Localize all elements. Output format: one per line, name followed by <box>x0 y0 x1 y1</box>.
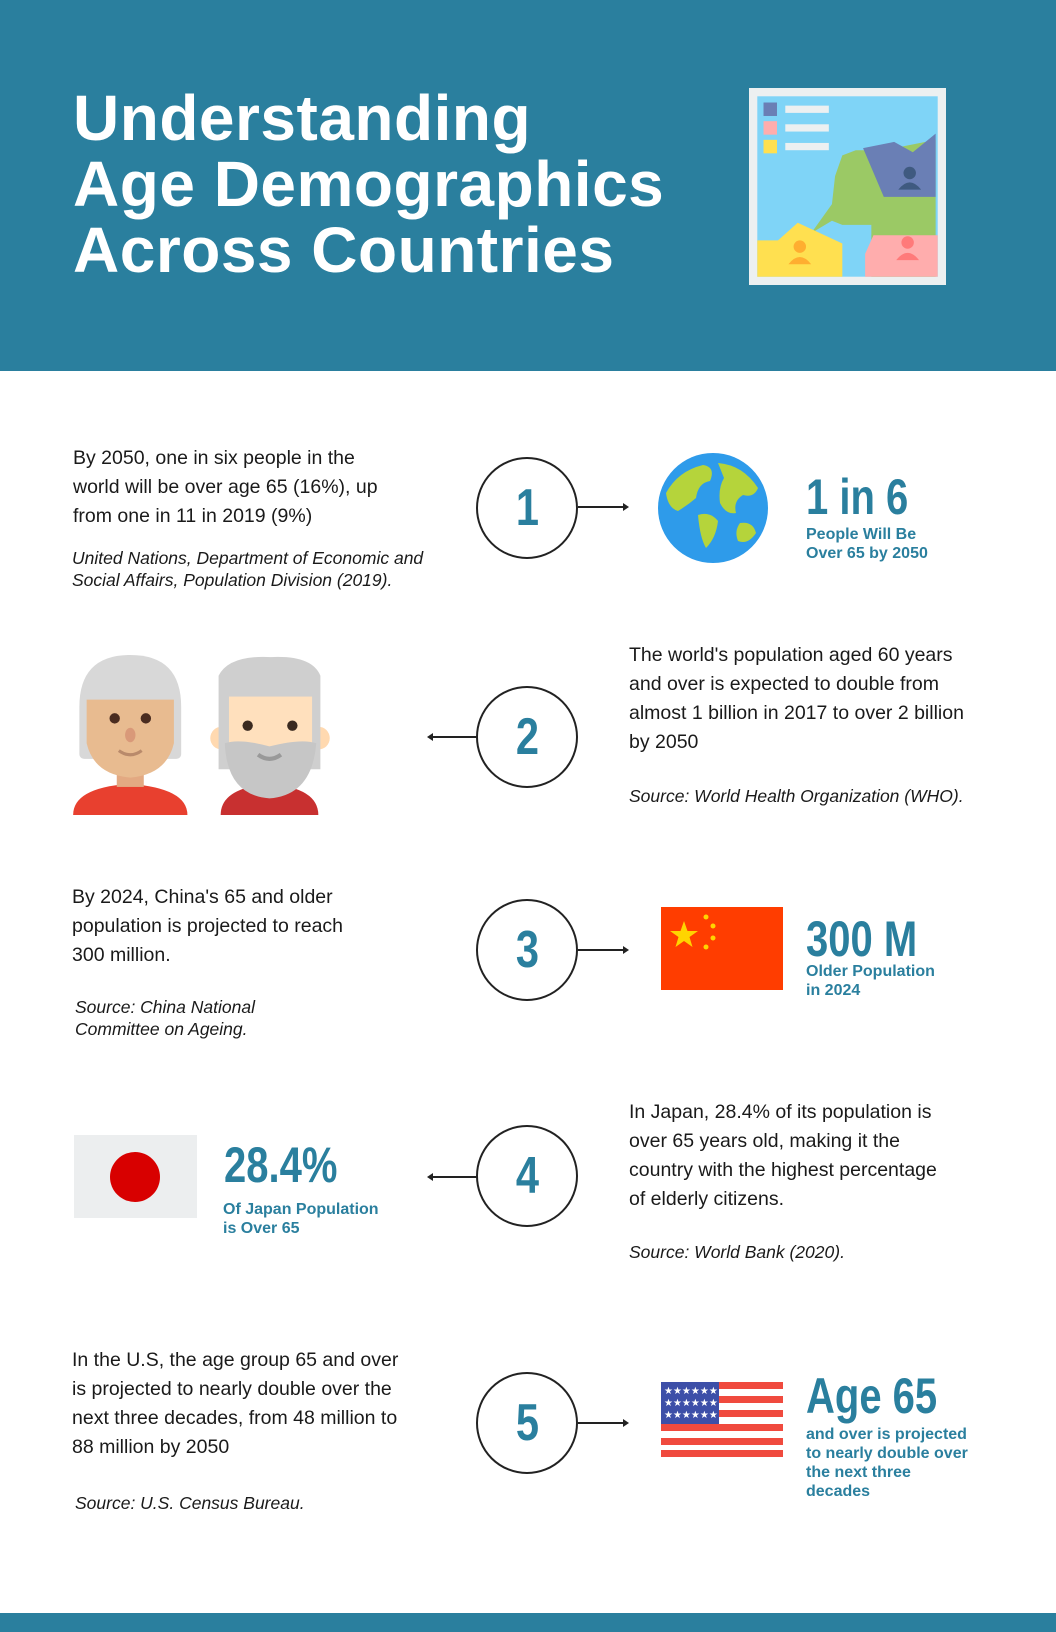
icon: elderly couple <box>73 655 330 815</box>
arrow 1 <box>578 506 627 508</box>
text: row3: By 2024, China's 65 and older <box>72 886 333 908</box>
text: row2: and over is expected to double from <box>629 673 939 695</box>
number circle 1 <box>476 457 578 559</box>
number circle 2: 2 <box>515 708 539 766</box>
stat 4 label: Of Japan Population <box>223 1201 379 1218</box>
source: row1 <box>72 548 424 590</box>
row 2 <box>73 644 964 815</box>
stat 4 label <box>223 1201 379 1237</box>
text: row4: of elderly citizens. <box>629 1188 784 1210</box>
stat 5 label: the next three <box>806 1464 911 1481</box>
icon: japan flag <box>74 1135 197 1218</box>
header band <box>0 0 1056 371</box>
source: row3 <box>75 997 256 1039</box>
stat 4: 28.4% <box>224 1137 337 1193</box>
number circle 4: 4 <box>515 1147 539 1205</box>
stat 1 label <box>806 526 928 562</box>
icon: us flag: ★★★★★★ <box>664 1398 718 1409</box>
stat 3 label: Older Population <box>806 963 935 980</box>
title: Age Demographics <box>73 148 664 220</box>
text: row3 <box>72 886 343 966</box>
stat 1 label: Over 65 by 2050 <box>806 545 928 562</box>
stat 5: Age 65 <box>806 1368 937 1424</box>
number circle 4 <box>476 1125 578 1227</box>
icon: china flag <box>661 907 783 990</box>
text: row2: almost 1 billion in 2017 to over 2 billion <box>629 702 964 724</box>
number circle 5 <box>476 1372 578 1474</box>
stat 1: 1 in 6 <box>806 469 908 525</box>
row 1 <box>72 447 928 590</box>
arrow 3 <box>578 949 627 951</box>
number circle 5: 5 <box>515 1394 539 1452</box>
text: row5 <box>72 1349 398 1458</box>
row 5 <box>72 1349 968 1513</box>
text: row3: population is projected to reach <box>72 915 343 937</box>
source: row4: Source: World Bank (2020). <box>629 1242 845 1262</box>
source: row5: Source: U.S. Census Bureau. <box>75 1493 305 1513</box>
text: row5: is projected to nearly double over the <box>72 1378 392 1400</box>
source: row1: United Nations, Department of Economic and <box>72 548 423 568</box>
text: row4: country with the highest percentage <box>629 1159 937 1181</box>
title: Across Countries <box>73 214 614 286</box>
arrow 2 <box>429 736 477 738</box>
text: row1: world will be over age 65 (16%), up <box>73 476 378 498</box>
number circle 3: 3 <box>515 921 539 979</box>
arrow 5 <box>578 1422 627 1424</box>
text: row1: from one in 11 in 2019 (9%) <box>73 505 312 527</box>
text: row4: over 65 years old, making it the <box>629 1130 900 1152</box>
text: row4: In Japan, 28.4% of its population is <box>629 1101 931 1123</box>
number circle 2 <box>476 686 578 788</box>
row 4 <box>74 1101 937 1262</box>
source: row2: Source: World Health Organization (WHO). <box>629 786 964 806</box>
title <box>73 82 664 286</box>
icon: us flag: ★★★★★★ <box>664 1410 718 1421</box>
source: row1: Social Affairs, Population Division (2019). <box>72 570 392 590</box>
icon: us flag <box>661 1382 783 1457</box>
stat 5 label: decades <box>806 1483 870 1500</box>
text: row4 <box>629 1101 937 1210</box>
icon: globe <box>658 453 768 563</box>
source: row3: Committee on Ageing. <box>75 1019 248 1039</box>
stat 4 label: is Over 65 <box>223 1220 300 1237</box>
text: row2: by 2050 <box>629 731 698 753</box>
row 3 <box>72 886 935 1039</box>
footer bar <box>0 1613 1056 1632</box>
stat 3 label <box>806 963 935 999</box>
stat 1 label: People Will Be <box>806 526 916 543</box>
arrow 4 <box>429 1176 477 1178</box>
stat 3 label: in 2024 <box>806 982 860 999</box>
text: row5: In the U.S, the age group 65 and over <box>72 1349 398 1371</box>
number circle 1: 1 <box>515 479 539 537</box>
text: row2: The world's population aged 60 years <box>629 644 953 666</box>
text: row1 <box>73 447 378 527</box>
title: Understanding <box>73 82 531 154</box>
stat 5 label: and over is projected <box>806 1426 967 1443</box>
stat 5 label <box>806 1426 968 1500</box>
stat 3: 300 M <box>806 911 917 967</box>
text: row2 <box>629 644 964 753</box>
text: row1: By 2050, one in six people in the <box>73 447 355 469</box>
text: row5: 88 million by 2050 <box>72 1436 229 1458</box>
stat 5 label: to nearly double over <box>806 1445 968 1462</box>
icon: us flag: ★★★★★★ <box>664 1386 718 1397</box>
source: row3: Source: China National <box>75 997 255 1017</box>
number circle 3 <box>476 899 578 1001</box>
icon: map <box>749 88 946 285</box>
text: row3: 300 million. <box>72 944 171 966</box>
text: row5: next three decades, from 48 million to <box>72 1407 397 1429</box>
